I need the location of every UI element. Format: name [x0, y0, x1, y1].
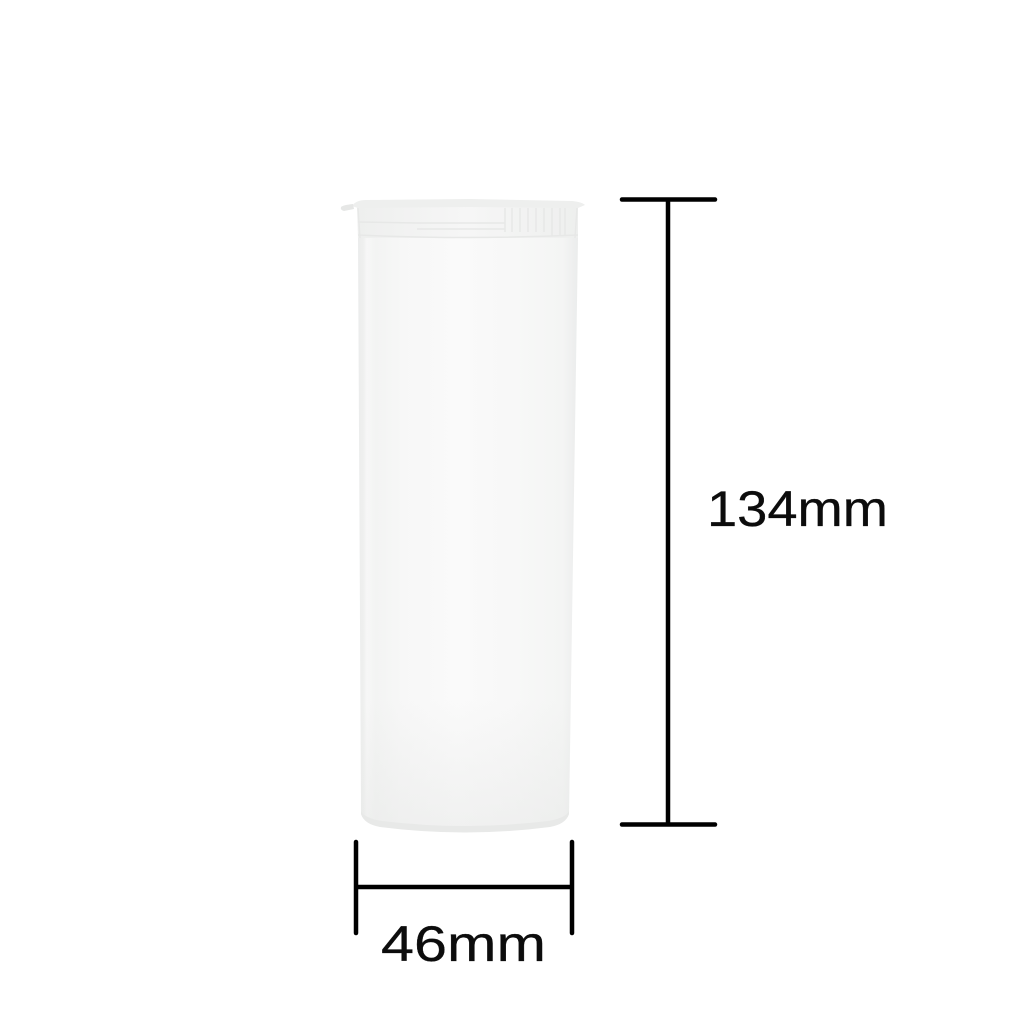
lid tab: [341, 204, 354, 211]
vial: [341, 199, 585, 832]
lid top edge: [352, 199, 585, 208]
vial lid: [357, 207, 578, 238]
lid ribs: [358, 208, 578, 238]
vial base rim: [361, 811, 569, 832]
vial body: [358, 238, 578, 832]
height label: 134mm: [707, 481, 888, 537]
vial lower shading: [361, 700, 571, 832]
width label: 46mm: [381, 916, 546, 972]
